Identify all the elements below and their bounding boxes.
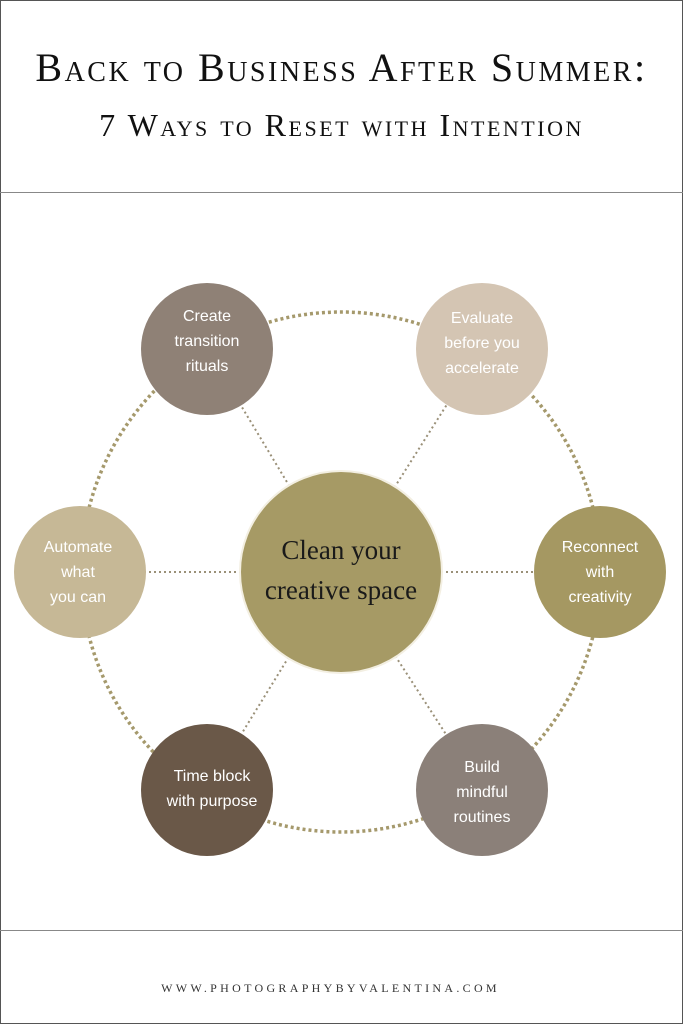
node: reconnect with creativity — [534, 506, 666, 638]
node: time block with purpose: Time block — [174, 768, 251, 785]
node: time block with purpose: with purpose — [166, 793, 257, 810]
node: evaluate before you accelerate: before you — [444, 335, 520, 352]
node: build mindful routines: routines — [454, 809, 510, 826]
node: reconnect with creativity: creativity — [568, 589, 632, 606]
center: clean your creative space: creative space — [265, 575, 417, 605]
node: automate what you can: what — [60, 564, 95, 581]
footer url: WWW.PHOTOGRAPHYBYVALENTINA.COM — [161, 981, 500, 995]
node: evaluate before you accelerate — [416, 283, 548, 415]
node: automate what you can: Automate — [44, 539, 112, 556]
node: evaluate before you accelerate: Evaluate — [451, 310, 513, 327]
node: reconnect with creativity: with — [585, 564, 614, 581]
node: build mindful routines: Build — [464, 759, 500, 776]
node: create transition rituals — [141, 283, 273, 415]
title: Back to Business After Summer: — [35, 45, 648, 90]
node: evaluate before you accelerate: accelerate — [445, 360, 519, 377]
subtitle: 7 Ways to Reset with Intention — [99, 107, 584, 143]
node: create transition rituals: rituals — [186, 358, 228, 375]
center: clean your creative space — [240, 471, 442, 673]
node: create transition rituals: Create — [183, 308, 231, 325]
node: automate what you can: you can — [50, 589, 106, 606]
node: build mindful routines — [416, 724, 548, 856]
center: clean your creative space: Clean your — [281, 535, 401, 565]
node: time block with purpose — [141, 724, 273, 856]
node: create transition rituals: transition — [175, 333, 239, 350]
node: build mindful routines: mindful — [456, 784, 508, 801]
node: reconnect with creativity: Reconnect — [562, 539, 639, 556]
node: automate what you can — [14, 506, 146, 638]
